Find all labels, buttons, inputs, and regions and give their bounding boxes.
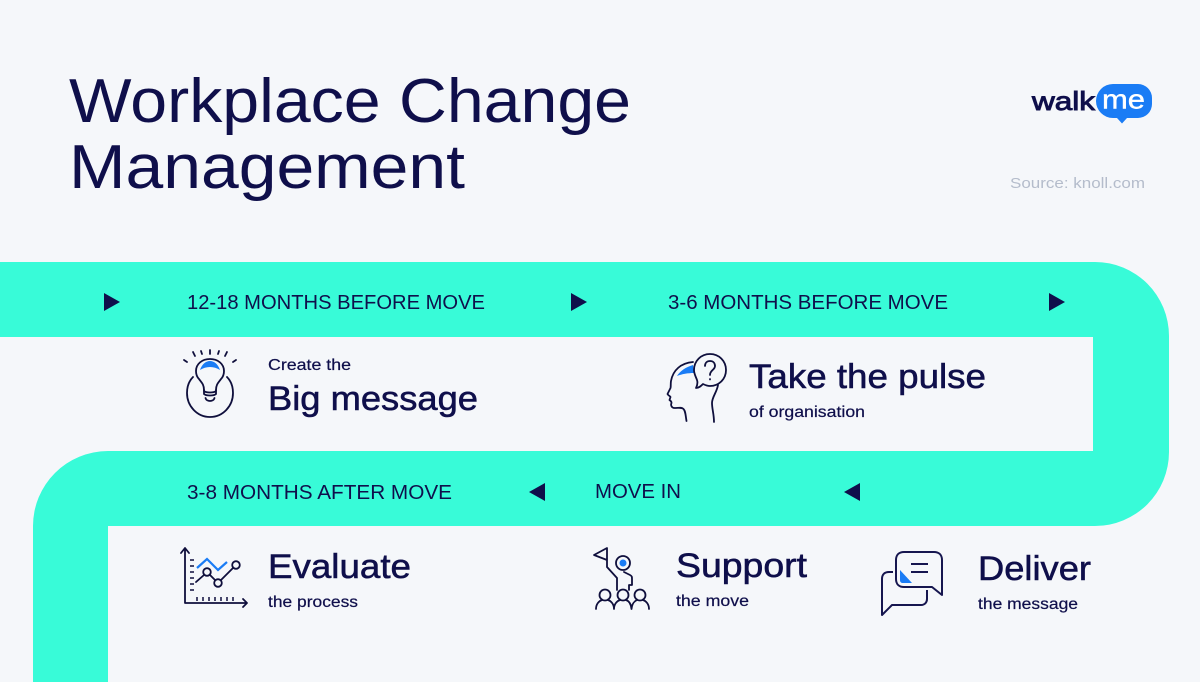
- heading: create the big message: [268, 357, 478, 418]
- arrow: second: [571, 293, 587, 311]
- arrow: third: [1049, 293, 1065, 311]
- winding timeline path: [0, 262, 1169, 682]
- heading: evaluate the process: the process: [268, 594, 358, 611]
- arrow: fourth: [844, 483, 860, 501]
- label: move in: MOVE IN: [595, 481, 681, 503]
- title: [69, 67, 631, 202]
- heading: take the pulse: of organisation: [749, 404, 865, 421]
- heading: deliver the message: Deliver: [978, 550, 1091, 588]
- label: 3-8 months after move: 3-8 MONTHS AFTER MOVE: [187, 482, 452, 504]
- heading: support the move: [676, 547, 808, 610]
- icon: line chart: [181, 548, 247, 607]
- arrow: fifth: [529, 483, 545, 501]
- logo: WalkMe: [1031, 84, 1152, 124]
- logo: WalkMe: walk: [1031, 86, 1096, 116]
- heading: evaluate the process: [268, 548, 411, 611]
- label: 3-6 months before move: 3-6 MONTHS BEFORE MOVE: [668, 292, 948, 314]
- heading: support the move: the move: [676, 593, 749, 610]
- heading: deliver the message: [978, 550, 1091, 613]
- logo: WalkMe: me: [1102, 84, 1145, 114]
- icon: head with question: [668, 354, 726, 422]
- heading: evaluate the process: Evaluate: [268, 548, 411, 586]
- heading: take the pulse: [749, 358, 986, 421]
- label: 12-18 months before move: 12-18 MONTHS BEFORE MOVE: [187, 292, 485, 314]
- source note: Source: knoll.com: [1010, 175, 1145, 192]
- title: Management: [69, 133, 465, 202]
- heading: take the pulse: Take the pulse: [749, 358, 986, 396]
- heading: deliver the message: the message: [978, 596, 1078, 613]
- icon: speech bubbles: [882, 552, 942, 615]
- title: Workplace Change: [69, 67, 631, 136]
- icon: leader with flag and group: [594, 548, 649, 609]
- arrow: start: [104, 293, 120, 311]
- heading: create the big message: Big message: [268, 380, 478, 418]
- icon: light bulb: [184, 350, 236, 417]
- heading: create the big message: Create the: [268, 357, 351, 374]
- heading: support the move: Support: [676, 547, 808, 585]
